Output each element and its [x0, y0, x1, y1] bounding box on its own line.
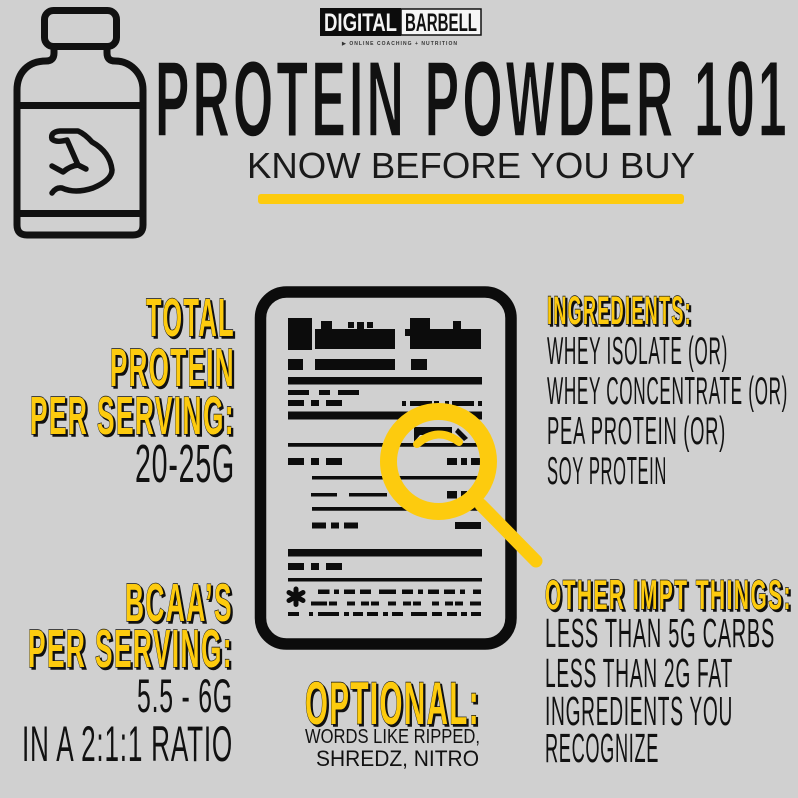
text: PER SERVING: [28, 619, 233, 679]
panel: total protein: 20-25G [135, 434, 235, 494]
icon: protein bottle [17, 10, 143, 235]
panel: optional: SHREDZ, NITRO [316, 746, 479, 771]
subtitle: KNOW BEFORE YOU BUY [247, 145, 695, 186]
panel: BCAAs [22, 573, 233, 772]
panel: BCAAs: IN A 2:1:1 RATIO [22, 716, 233, 772]
panel: total protein [30, 288, 235, 494]
panel: BCAAs: 5.5 - 6G [137, 669, 233, 722]
text: TOTAL [146, 288, 235, 348]
logo: Digital Barbell: ▶ ONLINE COACHING + NUTRITION [341, 41, 457, 47]
icon: flexed arm [52, 131, 112, 193]
text: PER SERVING: [30, 386, 235, 446]
text: BCAA’S [125, 573, 233, 633]
panel: optional: WORDS LIKE RIPPED, [305, 726, 480, 748]
yellow divider bar [258, 194, 684, 204]
logo: Digital Barbell [320, 8, 481, 47]
asterisk [289, 589, 303, 604]
nutrition label [260, 292, 536, 644]
text: PROTEIN [110, 338, 235, 398]
panel: other important things [545, 571, 792, 771]
panel: other important things: RECOGNIZE [545, 725, 659, 771]
label text blocks [288, 318, 482, 616]
magnifying glass [388, 412, 536, 561]
text: OPTIONAL: [305, 670, 480, 737]
panel: optional [305, 670, 480, 771]
logo: Digital Barbell: DIGITAL [324, 9, 397, 37]
panel: ingredients [547, 289, 788, 493]
logo: Digital Barbell: BARBELL [405, 9, 477, 37]
